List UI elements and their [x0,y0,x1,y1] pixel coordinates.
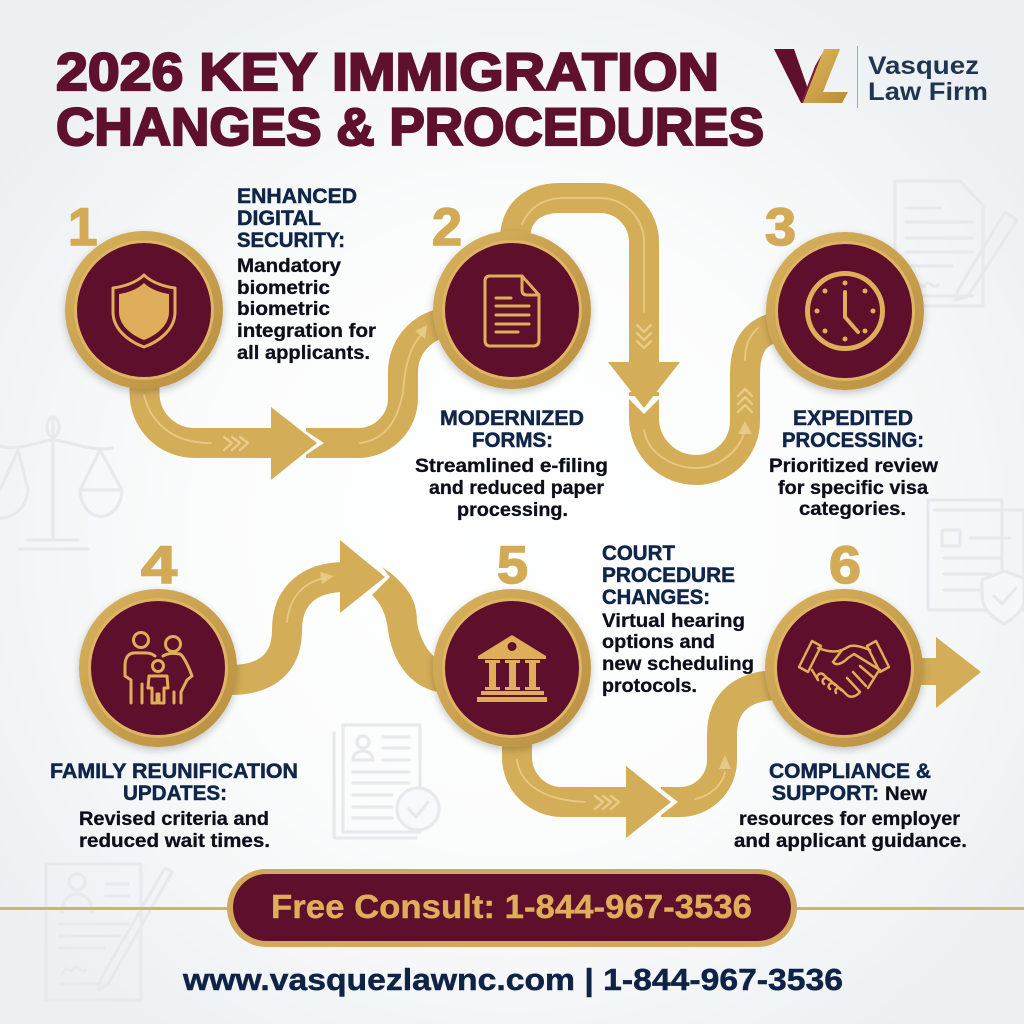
text: compliance and support: SUPPORT: [772,782,879,805]
text: expedited processing [769,407,939,520]
text: enhanced digital security: ENHANCED [237,185,357,208]
step 5 medallion with courthouse icon [433,589,591,747]
arrow: connector to step 5 [372,567,445,693]
logo: Vasquez Law Firm [774,46,988,108]
consult button [227,869,797,947]
text: court procedure changes: protocols. [602,675,697,697]
step 3 number: 3 [765,198,796,257]
footer contact line: www.vasquezlawnc.com | 1-844-967-3536 [182,962,843,997]
text: family reunification updates [50,760,298,852]
logo: Vasquez Law Firm: Law Firm [868,78,988,106]
text: family reunification updates: UPDATES: [123,782,227,805]
logo: Vasquez Law Firm: Vasquez [868,52,979,80]
text: enhanced digital security: biometric [237,298,330,320]
watermark: scales of justice [0,417,122,549]
text: modernized forms: FORMS: [472,429,553,452]
watermark: profile document with check [334,725,439,838]
consult button: Free Consult: 1-844-967-3536 [271,888,752,925]
text: modernized forms: Streamlined e-filing [415,455,608,477]
icon: courthouse [477,635,547,702]
arrow: connector to step 2 [298,322,460,460]
watermark: form and pen [46,864,172,1000]
icon: document [485,276,539,346]
text: enhanced digital security [237,185,376,364]
text: enhanced digital security: integration for [237,320,376,342]
arrowhead: step 1 [224,407,317,480]
divider line behind consult button [0,907,1024,910]
text: court procedure changes: PROCEDURE [602,564,735,587]
icon: shield [113,275,175,347]
text: expedited processing: PROCESSING: [782,429,924,452]
text: compliance and support [734,760,967,852]
text: enhanced digital security: DIGITAL [237,207,321,230]
step 6 medallion with handshake icon [765,589,923,747]
step 6 number: 6 [829,536,861,595]
text: expedited processing: categories. [799,498,906,520]
text: expedited processing: EXPEDITED [793,407,913,430]
text: family reunification updates: reduced wait times. [79,830,270,852]
text: court procedure changes [602,542,754,697]
step 3 medallion with clock icon [766,232,924,390]
arrow: connector to step 6 [626,685,780,838]
step 2 medallion with document icon [433,231,591,389]
title [56,43,764,157]
text: enhanced digital security: SECURITY: [237,229,345,252]
text: compliance and support: New [885,783,928,805]
step 1 number: 1 [68,198,97,257]
text: court procedure changes: options and [602,631,715,653]
arrow: step 4 up to arrowhead [230,540,385,680]
text: enhanced digital security: Mandatory [237,255,341,277]
step 4 medallion with family icon [79,589,237,747]
arrow: U-bend up to step 3 [626,325,785,470]
arrow: step 6 exit [915,637,981,708]
text: family reunification updates: FAMILY REUNIFICATION [50,760,298,783]
text: modernized forms [415,407,608,521]
text: enhanced digital security: biometric [237,277,330,299]
arrow: step 2 arch down [515,198,644,368]
text: modernized forms: and reduced paper [429,477,604,499]
watermark: document and pen [895,181,1017,306]
watermark: document with shield [928,500,1024,624]
step 5 number: 5 [497,536,528,595]
text: enhanced digital security: all applicants. [237,342,370,364]
text: modernized forms: MODERNIZED [440,407,584,430]
text: expedited processing: for specific visa [778,477,928,499]
icon: handshake [799,641,889,697]
text: modernized forms: processing. [457,499,568,521]
arrow: step 1 to notch [144,380,275,443]
text: expedited processing: Prioritized review [769,455,939,477]
text: compliance and support: COMPLIANCE & [769,760,931,783]
title: 2026 KEY IMMIGRATION [56,43,719,102]
step 2 number: 2 [432,198,462,257]
arrowhead: step 2 [608,325,680,408]
text: court procedure changes: new scheduling [602,653,754,675]
step 1 medallion with shield icon [65,231,223,389]
text: compliance and support: resources for employer [739,808,960,830]
title: CHANGES & PROCEDURES [56,98,764,157]
step 4 number: 4 [141,536,178,595]
text: court procedure changes: COURT [602,542,675,565]
text: compliance and support: and applicant guidance. [734,830,967,852]
icon: clock [808,274,882,348]
arrow: step 5 down to arrowhead [517,740,671,838]
text: court procedure changes: Virtual hearing [602,610,745,632]
icon: family [125,632,192,703]
text: court procedure changes: CHANGES: [602,586,710,609]
text: family reunification updates: Revised criteria and [79,808,269,830]
